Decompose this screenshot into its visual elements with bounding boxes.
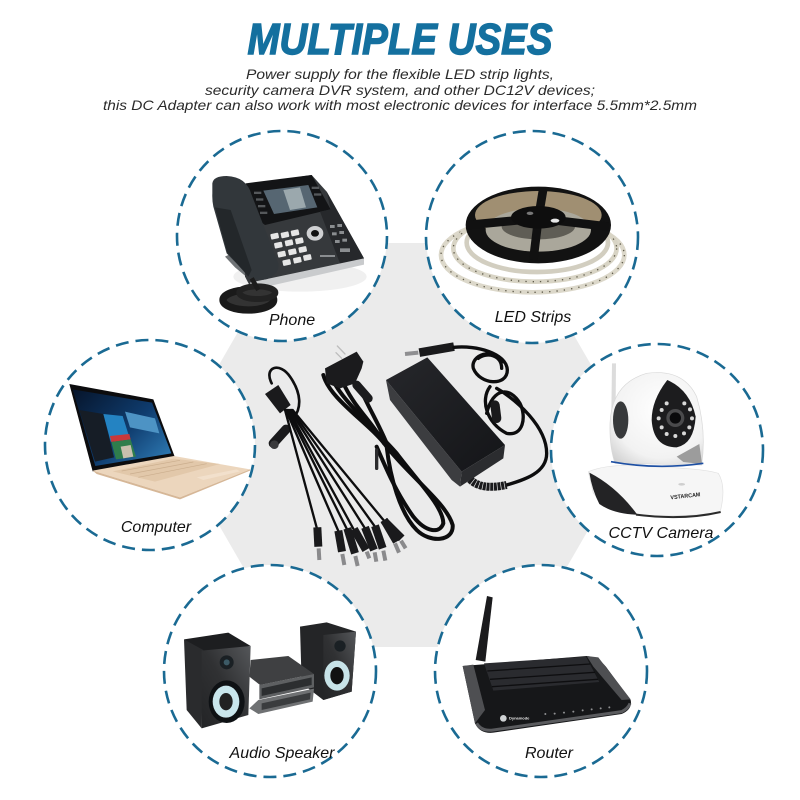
panel: audio speaker	[164, 565, 376, 777]
label: Router: Router	[525, 745, 574, 762]
power cord with wall plug	[323, 346, 453, 539]
adapter brick	[386, 357, 505, 487]
panel: computer	[45, 340, 255, 550]
panel: router	[435, 565, 647, 777]
icon: hi-fi speakers	[184, 622, 356, 728]
label: Phone: Phone	[269, 312, 315, 329]
panel: CCTV camera	[551, 344, 763, 556]
label: Computer: Computer	[121, 519, 192, 536]
icon: LED strip reel	[441, 187, 624, 292]
panel: phone	[177, 131, 387, 341]
label: LED Strips: LED Strips	[495, 309, 571, 326]
DC plug and adapter cable	[405, 347, 547, 487]
icon: desk phone	[212, 175, 367, 310]
description text: security camera DVR system, and other DC12V devices;	[205, 82, 595, 98]
icon: security camera	[588, 363, 723, 517]
label: CCTV Camera: CCTV Camera	[609, 525, 714, 542]
icon: wifi router	[463, 596, 631, 733]
title: MULTIPLE USES	[248, 15, 552, 64]
panel: LED strips	[426, 131, 638, 343]
description text: Power supply for the flexible LED strip lights,	[246, 66, 554, 82]
label: Audio Speaker: Audio Speaker	[229, 745, 335, 762]
grey hexagon background	[190, 258, 620, 632]
icon: wifi router: Dynamode	[509, 716, 530, 721]
description text	[103, 66, 697, 113]
icon: security camera: VSTARCAM	[670, 492, 701, 501]
description text: this DC Adapter can also work with most electronic devices for interface 5.5mm*2.5mm	[103, 97, 697, 113]
icon: laptop	[69, 384, 250, 499]
power adapter with cables and splitter	[265, 346, 547, 566]
splitter cable	[265, 368, 406, 566]
